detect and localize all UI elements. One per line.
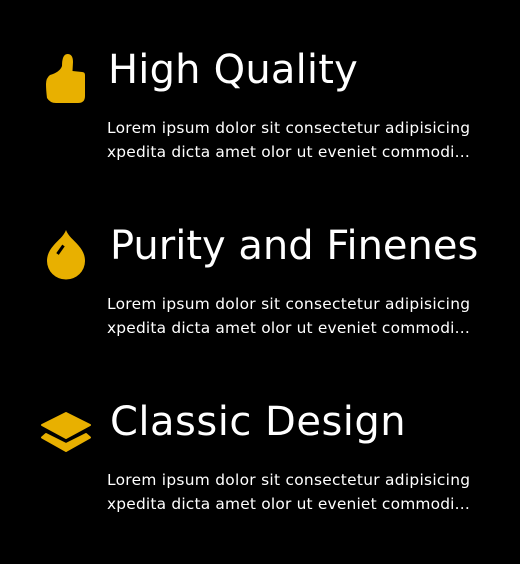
- text: third description: xpedita dicta amet olor ut eveniet commodi...: [107, 495, 470, 513]
- text: second description: xpedita dicta amet olor ut eveniet commodi...: [107, 319, 470, 337]
- text: third description: Lorem ipsum dolor sit consectetur adipisicing: [107, 471, 470, 489]
- text: second description: [107, 295, 470, 337]
- icon: layers: [41, 412, 91, 452]
- heading: Purity and Finenes: Purity and Finenes: [110, 223, 478, 269]
- heading: Classic Design: Classic Design: [110, 399, 406, 445]
- icon: drop: [47, 230, 85, 280]
- heading: High Quality: High Quality: [108, 47, 358, 93]
- text: first description: Lorem ipsum dolor sit consectetur adipisicing: [107, 119, 470, 137]
- text: third description: [107, 471, 470, 513]
- text: second description: Lorem ipsum dolor sit consectetur adipisicing: [107, 295, 470, 313]
- text: first description: xpedita dicta amet olor ut eveniet commodi...: [107, 143, 470, 161]
- icon: thumbs up: [46, 54, 85, 103]
- text: first description: [107, 119, 470, 161]
